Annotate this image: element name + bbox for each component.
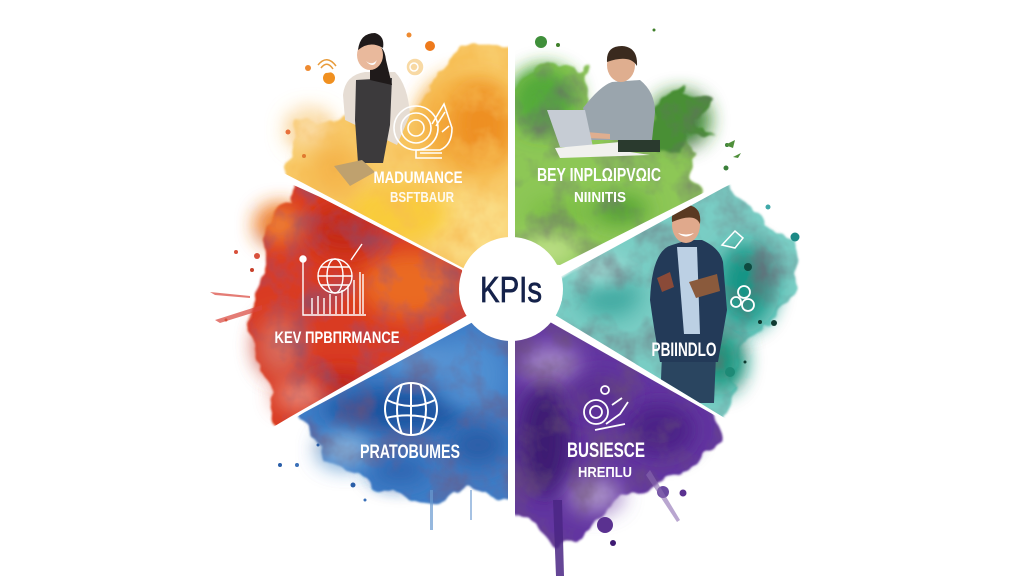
panel: green segment (515, 28, 741, 265)
label: green segment heading: BEY INPLΩIPVΩIC (537, 165, 661, 185)
icon: leaf sketch (722, 231, 743, 248)
label: teal segment heading: PBIINDLO (652, 340, 716, 361)
icon: globe with bar chart (300, 244, 366, 315)
center circle: KPIs (459, 237, 563, 341)
icon: wifi badge (318, 59, 336, 73)
person: woman with laptop bag (334, 33, 410, 186)
icon: target badge (406, 58, 424, 76)
panel: teal segment (556, 184, 800, 418)
panel: blue segment (278, 322, 508, 530)
label: orange segment heading: MADUMANCE (374, 168, 462, 187)
wash: red watercolor (240, 185, 466, 426)
center circle: KPIs: KPIs (480, 269, 542, 310)
panel: orange performance segment (285, 32, 520, 290)
label: green segment heading (538, 168, 661, 202)
panel: red key performance segment (210, 185, 466, 426)
icon: maze emblem (394, 104, 452, 158)
icon: gear swirl (584, 386, 628, 430)
icon: globe (385, 383, 437, 435)
person: man at laptop (547, 46, 660, 158)
label: purple segment heading (568, 442, 644, 477)
icon: molecule (731, 286, 754, 311)
wash: green watercolor (505, 66, 718, 285)
label: purple segment heading: HREΠLU (578, 464, 632, 481)
label: green segment heading: NIINITIS (574, 189, 626, 206)
label: red segment heading: KEV ΠPBΠRMANCE (274, 328, 400, 347)
infographic: KPI watercolor wheel (210, 28, 800, 576)
wash: blue watercolor (296, 322, 508, 506)
label: blue segment heading: PRATOBUMES (360, 442, 460, 463)
label: orange segment heading (374, 172, 462, 202)
label: orange segment heading: BSFTBAUR (390, 189, 454, 206)
wash: purple watercolor (505, 310, 722, 545)
person: man in blazer holding notebooks (650, 205, 727, 403)
wash: orange watercolor (285, 48, 520, 290)
label: purple segment heading: BUSIESCE (567, 439, 645, 462)
wash: teal watercolor (556, 184, 800, 418)
panel: purple segment (505, 310, 722, 576)
